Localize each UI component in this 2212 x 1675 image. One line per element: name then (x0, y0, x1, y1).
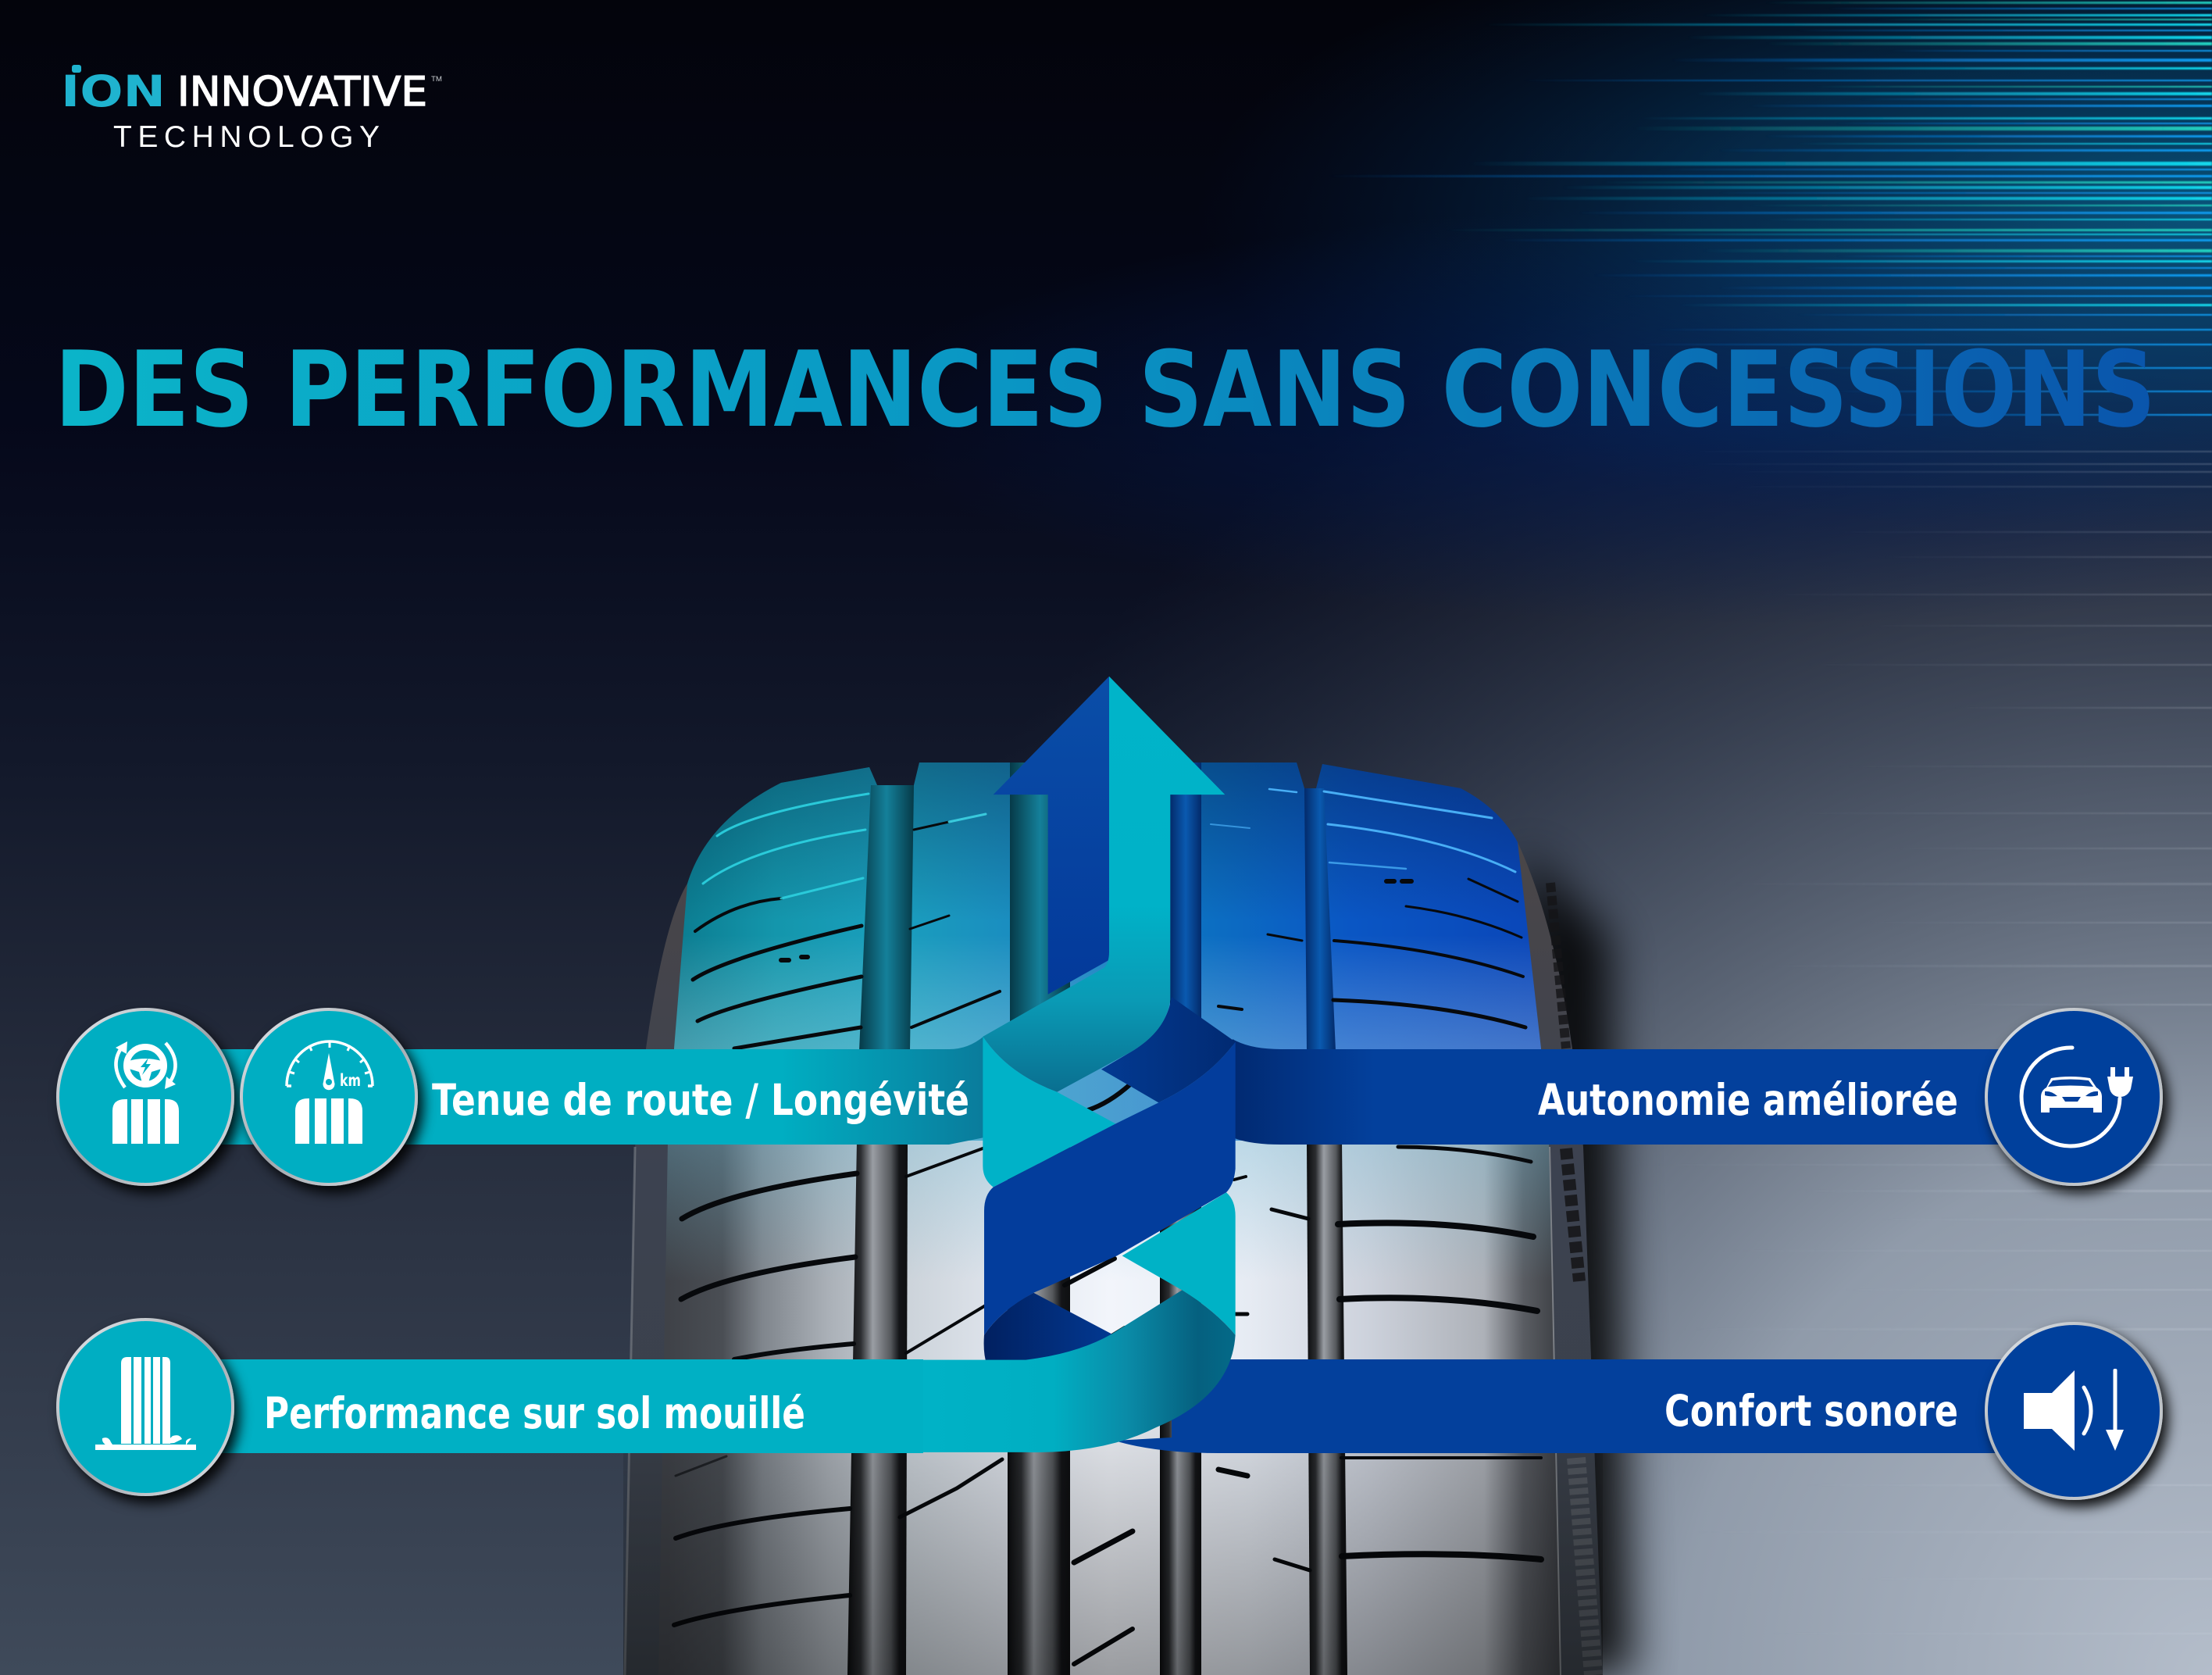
tire (623, 762, 1603, 1675)
ribbon arrow (922, 677, 1236, 1452)
lower ribbon, teal surface (922, 1290, 1236, 1452)
label: Performance sur sol mouillé: Performance sur sol mouillé (264, 1388, 805, 1438)
icon: mileage gauge: km (340, 1071, 361, 1090)
logo wordmark Innovative: INNOVATIVE (177, 69, 427, 116)
tread upper coloured section (674, 762, 1545, 1141)
lower ribbon, dark inner (984, 1293, 1119, 1364)
icon: wet road tire (58, 1320, 233, 1495)
bottom shading (623, 1359, 1603, 1675)
upper ribbon, teal outer (983, 1037, 1115, 1188)
central ribbon, blue (984, 1042, 1236, 1335)
icon: electric car range (1986, 1009, 2161, 1184)
label: Tenue de route / Longévité: Tenue de route / Longévité (432, 1075, 969, 1125)
band: Performance sur sol mouillé (145, 1359, 923, 1453)
label: Autonomie améliorée: Autonomie améliorée (1538, 1075, 1958, 1125)
tread sipes (674, 822, 1541, 1664)
band: Tenue de route / Longévité (145, 1036, 984, 1145)
grooves upper (859, 762, 1336, 1051)
tire shadow (1523, 852, 1632, 1675)
band: Confort sonore (1115, 1359, 2074, 1453)
icon: mileage gauge (241, 1009, 416, 1184)
tread top highlights (703, 789, 1515, 898)
band: Autonomie améliorée (1233, 1039, 2074, 1145)
label: Confort sonore: Confort sonore (1664, 1386, 1958, 1436)
grooves lower (847, 1141, 1347, 1675)
arrow head and upper ribbon, teal surface (983, 677, 1225, 1092)
arrow head and shaft, blue half (994, 677, 1109, 995)
upper ribbon, back section (1101, 997, 1236, 1102)
trademark: TM (431, 75, 442, 83)
logo wordmark ION: ION (61, 66, 166, 116)
tread lower (658, 1141, 1560, 1675)
logo: ION Innovative Technology (61, 65, 442, 154)
icon: steering wheel grip (58, 1009, 233, 1184)
sidewall (623, 842, 1603, 1675)
icon: low noise speaker (1986, 1323, 2161, 1498)
lower ribbon, teal outer (1122, 1192, 1236, 1335)
right sidewall lettering (625, 883, 1593, 1675)
logo subtitle: TECHNOLOGY (113, 120, 380, 154)
